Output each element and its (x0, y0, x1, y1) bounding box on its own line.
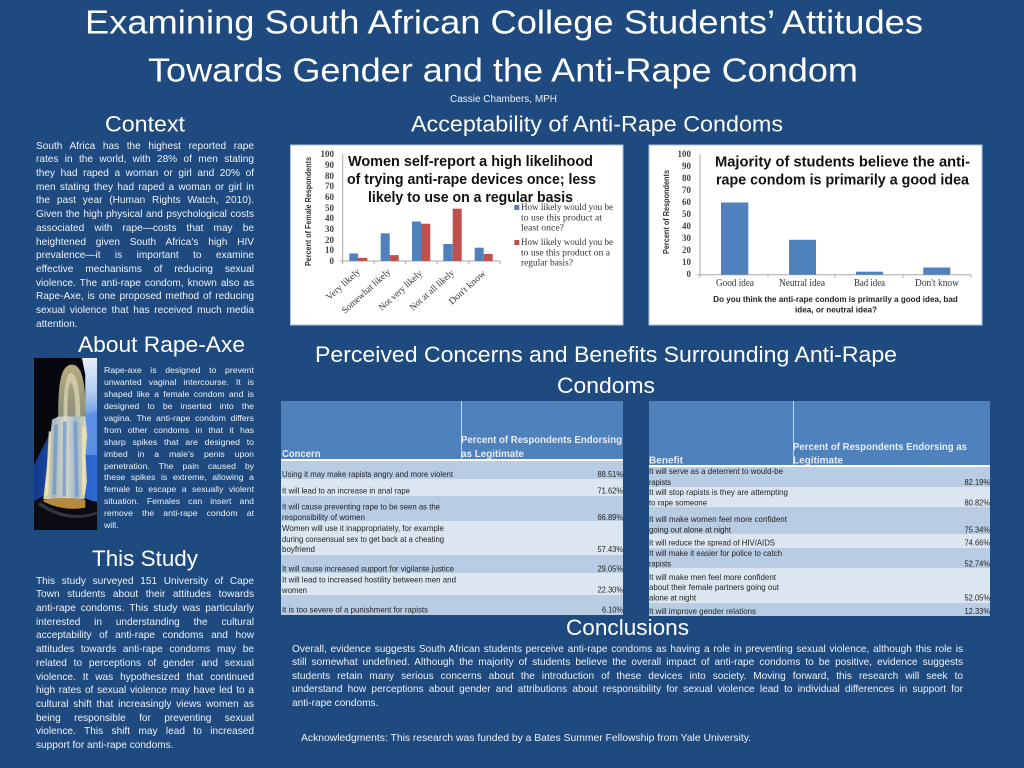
benefit labels: It will make men feel more confident (649, 572, 777, 582)
text block: context: rates in the world, with 28% of men stating (36, 154, 254, 165)
bars: use once (349, 222, 484, 261)
text block: about rape-axe: shaped like a female condom and is (104, 389, 254, 399)
text block: conclusions: still somewhat undefined. Although the majority of students believe the overall impact of anti-rape condoms to be positive, evidence suggests (292, 657, 963, 668)
x axis labels: Don't know (915, 278, 960, 289)
text block: about rape-axe: Rape-axe is designed to prevent (104, 365, 254, 375)
panel: chart of likelihood of trying anti-rape devices (290, 145, 623, 325)
benefit percentages: 74.66% (964, 538, 990, 548)
benefit labels: going out alone at night (649, 524, 732, 534)
y axis ticks: 0 (686, 269, 692, 279)
table: benefits (649, 401, 990, 616)
chart title: rape condom is primarily a good idea (716, 172, 970, 188)
x axis labels: Somewhat likely (340, 267, 393, 316)
concern percentages: 22.30% (598, 584, 623, 594)
x axis labels (325, 267, 488, 316)
y axis ticks: 50 (325, 203, 334, 213)
y axis ticks: 60 (325, 192, 334, 202)
y axis ticks: 40 (325, 213, 334, 223)
benefit percentages: 75.34% (964, 524, 990, 534)
text block: this study: violence. This shift may lead to increased (36, 726, 254, 737)
chart title: Women self-report a high likelihood (348, 153, 593, 170)
text block: about rape-axe: will. (104, 520, 118, 530)
heading: perceived concerns and benefits: Condoms (557, 373, 655, 398)
concern labels: It will lead to an increase in anal rape (282, 486, 410, 496)
y axis ticks: 10 (325, 245, 334, 255)
chart title: Majority of students believe the anti- (715, 154, 970, 170)
x axis labels: Very likely (325, 267, 363, 303)
panel: chart of overall opinion of the anti-rape condom (649, 145, 982, 325)
x axis labels (716, 278, 960, 289)
benefit labels: to rape someone (649, 498, 707, 508)
chart title (715, 154, 970, 188)
text block: about rape-axe: these spikes is extreme, allowing a (104, 472, 254, 482)
concern labels: It will cause preventing rape to be seen as the (282, 502, 440, 512)
benefit percentages: 82.19% (964, 477, 990, 487)
text block: about rape-axe: imbed in a male’s penis upon (104, 449, 254, 459)
bars (721, 202, 950, 275)
text block: this study: acceptability of anti-rape condoms and how (36, 630, 254, 641)
y axis ticks: 70 (682, 185, 692, 195)
acknowledgments: Acknowledgments: This research was funded by a Bates Summer Fellowship from Yale University. (301, 733, 751, 744)
concern labels: responsibility of women (282, 512, 365, 522)
text block: context: sexual violence that has received much media (36, 305, 254, 316)
x axis labels: Good idea (716, 278, 755, 289)
benefit labels: rapists (649, 558, 671, 568)
concern percentages: 88.51% (598, 469, 623, 479)
text block: context: violence. The anti-rape condom, known also as (36, 278, 254, 289)
header row: Percent of Respondents Endorsing as (793, 441, 967, 453)
text block: about rape-axe (104, 365, 254, 530)
legend (514, 203, 613, 268)
concern labels: Using it may make rapists angry and more violent (282, 469, 454, 479)
text block: about rape-axe: remove the anti-rape condom at (104, 508, 254, 518)
text block: conclusions: anti-rape condoms. (292, 698, 378, 709)
text block: about rape-axe: female to escape a sexually violent (104, 484, 254, 494)
y axis ticks: 100 (678, 149, 692, 159)
text block: conclusions: Overall, evidence suggests South African students perceive anti-rape condoms as having a role in preventing sexual violence, although this role is (292, 644, 963, 654)
text block: context: the past year (Human Rights Watch, 2010). (36, 195, 254, 206)
header row: Percent of Respondents Endorsing (461, 434, 622, 446)
legend: to use this product at (521, 214, 602, 224)
text block: this study: being responsible for preventing sexual (36, 713, 254, 724)
text block: this study: violence. It was hypothesized that continued (36, 672, 254, 683)
benefit labels: about their female partners going out (649, 582, 780, 592)
text block: this study (36, 576, 254, 751)
concern labels: during consensual sex to get back at a cheating (282, 534, 444, 544)
x axis labels: Don't know (447, 269, 488, 307)
header row (649, 401, 990, 466)
benefit percentages: 52.05% (964, 592, 990, 602)
text block: conclusions: understand how perceptions about gender and attributions about responsibility for sexual violence lead to individual differences in support for (292, 684, 963, 695)
text block: context: effective mechanisms of reducing sexual (36, 264, 254, 275)
y axis ticks: 30 (682, 233, 692, 243)
heading: acceptability: Acceptability of Anti-Rape Condoms (411, 112, 783, 136)
chart title: of trying anti-rape devices once; less (347, 171, 596, 188)
concern labels: boyfriend (282, 544, 315, 554)
table: concerns (281, 401, 623, 615)
axes (697, 154, 971, 278)
y axis ticks: 60 (682, 197, 692, 207)
concern percentages: 71.62% (598, 486, 623, 496)
benefit labels (649, 466, 788, 616)
y axis ticks: 50 (682, 209, 692, 219)
bars: use regularly (358, 209, 493, 261)
title: Towards Gender and the Anti-Rape Condom (148, 53, 858, 90)
header row (281, 401, 623, 460)
text block: about rape-axe: vagina. The anti-rape condom differs (104, 413, 254, 423)
x axis labels: Bad idea (854, 278, 885, 289)
y axis ticks: 20 (325, 235, 334, 245)
text block: conclusions (292, 644, 963, 709)
concern labels: It will lead to increased hostility between men and (282, 574, 456, 584)
text block: this study: interested in understanding the cultural (36, 617, 254, 628)
axis question: Do you think the anti-rape condom is primarily a good idea, bad (713, 294, 958, 304)
heading: conclusions: Conclusions (566, 615, 689, 640)
text block: this study: cultural shift that increasingly views women as (36, 699, 254, 710)
row backgrounds (281, 459, 623, 615)
benefit labels: It will reduce the spread of HIV/AIDS (649, 538, 775, 548)
y axis ticks: 90 (325, 160, 334, 170)
text block: this study: support for anti-rape condoms. (36, 740, 173, 751)
y axis ticks (320, 149, 334, 266)
text block: context: they had raped a woman or girl and 20% of (36, 168, 254, 179)
benefit labels: It will improve gender relations (649, 606, 756, 616)
chart title: likely to use on a regular basis (368, 189, 573, 206)
text block: about rape-axe: designed to be inserted into the (104, 401, 254, 411)
benefit percentages (964, 477, 990, 616)
legend: least once? (521, 224, 564, 234)
benefit percentages: 12.33% (964, 606, 990, 616)
text block: about rape-axe: penetration. The pain caused by (104, 460, 254, 470)
y axis label: Percent of Female Respondents (304, 157, 313, 266)
header row: Benefit (649, 454, 683, 466)
x axis labels: Not very likely (377, 269, 425, 313)
concern labels: It will cause increased support for vigilante justice (282, 564, 454, 574)
text block: conclusions: students retain many serious concerns about the introduction of these devices into society. Moving forward, this research will seek to (292, 671, 963, 682)
benefit labels: It will serve as a deterrent to would-be (649, 466, 783, 476)
header row: Concern (282, 448, 320, 460)
title: Examining South African College Students’ Attitudes (85, 4, 923, 42)
concern labels (281, 469, 456, 614)
text block: about rape-axe: from other condoms in that it has (104, 425, 254, 435)
legend: regular basis? (521, 258, 573, 268)
legend: How likely would you be (521, 203, 613, 213)
x axis labels: Not at all likely (408, 268, 457, 313)
benefit percentages: 80.82% (964, 498, 990, 508)
concern percentages: 29.05% (598, 564, 623, 574)
axis question: idea, or neutral idea? (795, 304, 877, 314)
benefit labels: It will make women feel more confident (649, 514, 788, 524)
heading: perceived concerns and benefits (315, 342, 897, 398)
x axis labels: Neutral idea (779, 278, 826, 289)
axis question (713, 294, 958, 314)
y axis ticks: 30 (325, 224, 334, 234)
benefit labels: alone at night (649, 592, 697, 602)
title (85, 4, 923, 90)
text block: context: associated with rape—costs that may be (36, 223, 254, 234)
text block: this study: related to perceptions of gender and sexual (36, 658, 254, 669)
axes (340, 154, 500, 264)
concern percentages: 66.89% (598, 512, 623, 522)
text block: this study: Town students about their attitudes towards (36, 589, 254, 600)
y axis ticks: 10 (682, 257, 692, 267)
y axis ticks: 80 (325, 171, 334, 181)
benefit labels: rapists (649, 477, 671, 487)
heading: this study: This Study (92, 546, 199, 571)
y axis ticks (678, 149, 692, 279)
text block: this study: anti-rape condoms. This study was particularly (36, 603, 254, 614)
text block: context (36, 140, 254, 330)
legend: How likely would you be (521, 238, 613, 248)
text block: context: attention. (36, 319, 78, 330)
legend: to use this product on a (521, 248, 611, 258)
y axis ticks: 70 (325, 181, 334, 191)
photo: rape-axe device (34, 358, 97, 530)
y axis ticks: 20 (682, 245, 692, 255)
concern percentages: 6.10% (602, 604, 623, 614)
heading: context: Context (105, 112, 186, 136)
benefit labels: It will make it easier for police to catch (649, 548, 782, 558)
text block: context: Rape-Axe, is one proposed method of reducing (36, 291, 254, 302)
y axis ticks: 100 (320, 149, 334, 159)
y axis ticks: 0 (330, 256, 334, 266)
concern labels: Women will use it inappropriately, for example (282, 523, 444, 533)
text block: this study: high rates of sexual violence may have led to a (36, 685, 254, 696)
y axis ticks: 40 (682, 221, 692, 231)
text block: about rape-axe: situation. Females can insert and (104, 496, 254, 506)
text block: context: men stating they had raped a woman or girl in (36, 182, 254, 193)
header row: as Legitimate (461, 448, 524, 460)
text block: context: South Africa has the highest reported rape (36, 140, 254, 152)
concern labels: women (281, 585, 307, 595)
text block: about rape-axe: sharp spikes that are designed to (104, 437, 254, 447)
row backgrounds (649, 465, 990, 616)
benefit percentages: 52.74% (964, 558, 990, 568)
y axis ticks: 80 (682, 173, 692, 183)
author: Cassie Chambers, MPH (450, 94, 557, 105)
concern percentages (598, 469, 623, 614)
text block: this study: attitudes towards anti-rape condoms may be (36, 644, 254, 655)
heading: about rape-axe: About Rape-Axe (78, 332, 245, 357)
chart title (347, 153, 596, 206)
text block: about rape-axe: unwanted vaginal intercourse. It is (104, 377, 254, 387)
y axis label: Percent of Respondents (662, 169, 671, 254)
heading: perceived concerns and benefits: Perceived Concerns and Benefits Surrounding Anti-Rape (315, 342, 897, 367)
concern labels: It is too severe of a punishment for rapists (282, 604, 428, 614)
text block: this study: This study surveyed 151 University of Cape (36, 576, 254, 586)
text block: context: prevalence—it is important to examine (36, 250, 254, 261)
benefit labels: It will stop rapists is they are attempting (649, 487, 788, 497)
y axis ticks: 90 (682, 161, 692, 171)
text block: context: heightened given South Africa’s high HIV (36, 237, 254, 248)
text block: context: Given the high physical and psychological costs (36, 209, 254, 220)
header row: Legitimate (793, 454, 843, 466)
concern percentages: 57.43% (598, 544, 623, 554)
